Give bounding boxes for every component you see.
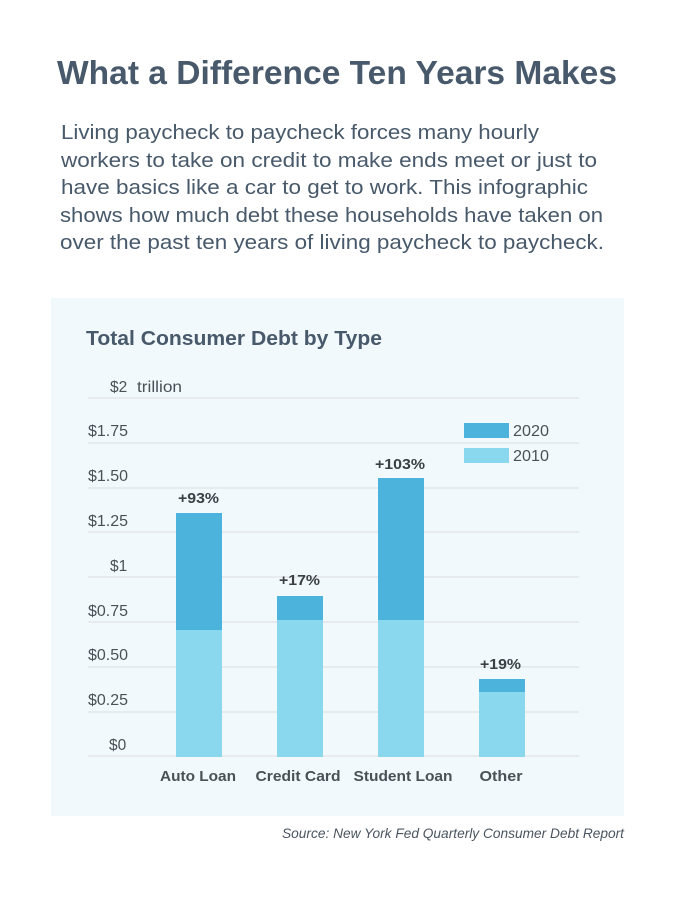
category labels <box>160 768 523 785</box>
category labels: Student Loan <box>354 768 452 785</box>
intro paragraph: shows how much debt these households have taken on <box>60 204 603 227</box>
legend: 2010 <box>513 448 549 465</box>
intro paragraph: over the past ten years of living paycheck to paycheck. <box>60 231 604 254</box>
y-axis labels: $0 <box>109 737 127 754</box>
category labels: Other <box>480 768 523 785</box>
bar: Student Loan: +103% <box>375 457 425 473</box>
bar: Credit Card <box>277 573 323 757</box>
y-axis labels: $1.25 <box>88 513 128 530</box>
panel: chart background <box>51 298 624 816</box>
y-axis labels: trillion <box>137 379 182 396</box>
y-axis labels: $1.50 <box>88 468 128 485</box>
bar: Other <box>479 657 525 757</box>
source note: Source: New York Fed Quarterly Consumer Debt Report <box>282 825 625 841</box>
y-axis labels: $0.50 <box>88 647 128 664</box>
y-axis labels: $2 <box>110 379 127 396</box>
bar: Student Loan <box>375 457 425 757</box>
category labels: Credit Card <box>256 768 340 785</box>
intro paragraph <box>60 121 604 254</box>
y-axis labels: $0.25 <box>88 692 128 709</box>
intro paragraph: Living paycheck to paycheck forces many hourly <box>61 121 540 144</box>
bar: Other: +19% <box>480 657 521 673</box>
y-axis labels: $1.75 <box>88 423 128 440</box>
y-axis labels: $1 <box>110 558 127 575</box>
y-axis labels <box>88 379 182 754</box>
legend: 2020 <box>513 423 549 440</box>
bar: Auto Loan <box>176 491 222 757</box>
category labels: Auto Loan <box>160 768 236 785</box>
intro paragraph: workers to take on credit to make ends meet or just to <box>60 149 597 172</box>
intro paragraph: have basics like a car to get to work. This infographic <box>61 176 588 199</box>
title: What a Difference Ten Years Makes <box>57 55 617 92</box>
bar: Credit Card: +17% <box>279 573 320 589</box>
y-axis labels: $0.75 <box>88 603 128 620</box>
chart heading: Total Consumer Debt by Type <box>86 328 382 350</box>
legend <box>464 423 549 465</box>
bar: Auto Loan: +93% <box>178 491 219 507</box>
